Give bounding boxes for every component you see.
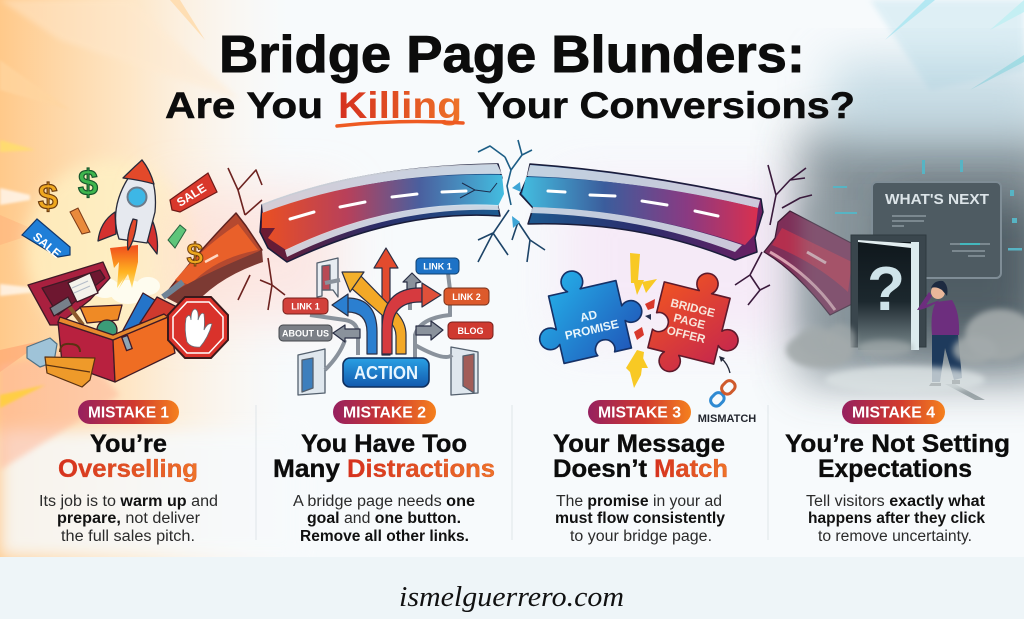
icon: open toolbox xyxy=(28,262,183,382)
action button: ACTION xyxy=(354,363,418,383)
icon: blue puzzle piece: AD xyxy=(579,307,599,325)
body text: to remove uncertainty. xyxy=(818,528,972,545)
title xyxy=(165,26,855,126)
broken bridge road xyxy=(165,140,870,330)
title: Are You xyxy=(165,85,323,126)
heading: You’re Not Setting xyxy=(785,430,1010,458)
badge: MISTAKE 2 xyxy=(343,404,426,422)
icon: sale tags xyxy=(22,173,217,261)
body text: prepare, not deliver xyxy=(57,510,200,527)
smoke cloud xyxy=(91,277,160,304)
heading: Distractions xyxy=(347,455,495,483)
icon: blue puzzle piece: PROMISE xyxy=(564,317,620,343)
icon: small toolboxes xyxy=(27,338,95,387)
badge xyxy=(842,400,945,424)
panel: mistake 4 xyxy=(785,400,1010,545)
badge: MISTAKE 4 xyxy=(852,404,935,422)
icon: open door with question mark: ? xyxy=(867,255,905,324)
icon: sale tags: SALE xyxy=(30,230,64,261)
badge xyxy=(333,400,436,424)
heading: Many xyxy=(273,455,340,483)
icon: broken fragments xyxy=(634,299,655,340)
icon: dollar signs: $ xyxy=(187,238,204,271)
column dividers xyxy=(256,405,768,540)
icon: dollar signs xyxy=(38,162,204,271)
body text xyxy=(806,493,985,545)
heading xyxy=(58,430,198,483)
icon: dollar signs: $ xyxy=(78,162,98,203)
icon: small doors xyxy=(298,258,478,395)
body text: happens after they click xyxy=(808,510,985,527)
icon: lightning bolts xyxy=(626,253,657,388)
heading xyxy=(273,430,495,483)
link labels: LINK 1 xyxy=(423,262,452,272)
icon: red puzzle piece: OFFER xyxy=(665,324,707,346)
body text: Remove all other links. xyxy=(300,528,469,545)
cracks xyxy=(228,140,812,310)
heading xyxy=(553,430,728,483)
icon: open door with question mark xyxy=(851,235,926,350)
icon: blue puzzle piece xyxy=(526,257,649,368)
body text xyxy=(555,493,725,545)
heading: You’re xyxy=(90,430,167,458)
icon: sale tags: SALE xyxy=(174,181,209,210)
body text: goal and one button. xyxy=(307,510,461,527)
icon: dollar signs: $ xyxy=(38,176,58,217)
title: Killing xyxy=(338,85,462,126)
grey paths xyxy=(310,273,452,370)
heading: Your Message xyxy=(553,430,725,458)
heading xyxy=(785,430,1010,483)
badge xyxy=(588,400,691,424)
icon: broken chain mismatch: MISMATCH xyxy=(698,413,756,425)
body text: must flow consistently xyxy=(555,510,725,527)
title: Your Conversions? xyxy=(477,85,855,126)
what's next screen xyxy=(872,182,1001,278)
footer url: ismelguerrero.com xyxy=(399,581,624,613)
heading: Match xyxy=(654,455,728,483)
icon: red puzzle piece: BRIDGE xyxy=(669,296,716,320)
road section: centre right xyxy=(520,164,763,260)
icon: rocket xyxy=(98,160,158,290)
icon: confused man xyxy=(917,281,985,400)
road section: centre left xyxy=(260,164,504,262)
heading: Overselling xyxy=(58,455,198,483)
link labels: LINK 2 xyxy=(452,292,481,302)
body text xyxy=(293,493,475,545)
icon: broken chain mismatch xyxy=(698,356,756,425)
link labels: BLOG xyxy=(458,326,484,336)
road section: far right broken piece xyxy=(764,200,870,330)
body text: The promise in your ad xyxy=(556,493,722,510)
panel: mistake 3 xyxy=(553,400,728,545)
heading: You Have Too xyxy=(301,430,467,458)
badge: MISTAKE 3 xyxy=(598,404,681,422)
illustration: overselling toolbox xyxy=(22,160,228,387)
body text xyxy=(39,493,218,545)
heading: Doesn’t xyxy=(553,455,648,483)
action button xyxy=(343,358,429,387)
panel: mistake 1 xyxy=(39,400,218,545)
illustration: uncertain door xyxy=(786,160,1024,400)
icon: red puzzle piece xyxy=(643,263,752,386)
heading: Expectations xyxy=(818,455,972,483)
link labels xyxy=(279,258,493,341)
body text: to your bridge page. xyxy=(570,528,712,545)
road section: far left broken piece xyxy=(165,213,263,310)
what's next screen: WHAT'S NEXT xyxy=(885,191,989,208)
title: Bridge Page Blunders: xyxy=(219,26,805,84)
icon: red puzzle piece: PAGE xyxy=(672,311,707,332)
body text: A bridge page needs one xyxy=(293,493,475,510)
body text: Its job is to warm up and xyxy=(39,493,218,510)
icon: tangled arrows xyxy=(332,248,443,355)
badge xyxy=(78,400,179,424)
illustration: mismatched puzzle pieces xyxy=(526,253,756,425)
data ticks xyxy=(833,160,1022,250)
badge: MISTAKE 1 xyxy=(88,404,169,422)
icon: stop hand sign xyxy=(168,297,228,358)
body text: the full sales pitch. xyxy=(61,528,195,545)
fog clouds xyxy=(786,309,1024,394)
link labels: ABOUT US xyxy=(282,328,329,338)
body text: Tell visitors exactly what xyxy=(806,493,985,510)
illustration: distractions xyxy=(279,248,493,395)
link labels: LINK 1 xyxy=(291,302,320,312)
panel: mistake 2 xyxy=(273,400,495,545)
